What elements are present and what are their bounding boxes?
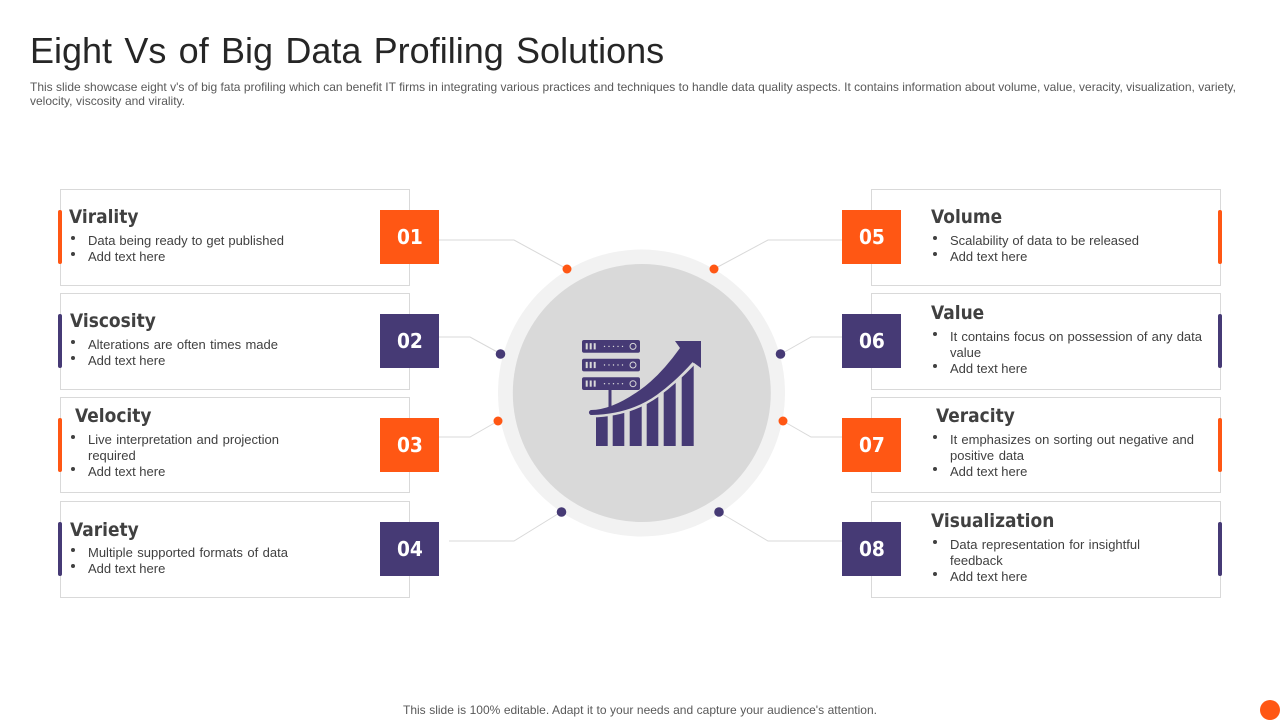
panel: 03 Velocity: Add text here	[88, 464, 165, 479]
panel: 06 Value: 06	[859, 329, 884, 353]
panel: 08 Visualization: Visualization	[931, 510, 1054, 532]
panel: 02 Viscosity	[58, 293, 439, 390]
panel: 02 Viscosity: Alterations are often times made	[88, 337, 278, 352]
panel: 02 Viscosity: Add text here	[88, 353, 165, 368]
panel: 08 Visualization	[842, 501, 1222, 598]
panel: 06 Value: Add text here	[950, 361, 1027, 376]
panel: 01 Virality: Add text here	[88, 249, 165, 264]
inner disc	[513, 264, 771, 522]
panel: 08 Visualization: Data representation for insightful	[950, 537, 1140, 552]
panel: 04 Variety: 04	[397, 537, 422, 561]
panel: 01 Virality	[58, 189, 439, 286]
panel: 06 Value: Value	[931, 302, 984, 324]
panel: 05 Volume: Add text here	[950, 249, 1027, 264]
panel: 06 Value: value	[950, 345, 981, 360]
central circle with icon	[498, 250, 785, 536]
panel: 01 Virality: Virality	[69, 206, 139, 228]
panel: 07 Veracity: positive data	[950, 448, 1024, 463]
panel: 04 Variety: Multiple supported formats of data	[88, 545, 288, 560]
panel: 07 Veracity: Add text here	[950, 464, 1027, 479]
panel: 06 Value: It contains focus on possession of any data	[950, 329, 1202, 344]
panel: 03 Velocity: required	[88, 448, 136, 463]
panel: 03 Velocity	[58, 397, 439, 493]
panel: 04 Variety	[58, 501, 439, 598]
panel: 01 Virality: 01	[397, 225, 422, 249]
panel: 08 Visualization: feedback	[950, 553, 1003, 568]
panel: 04 Variety: Variety	[70, 519, 139, 541]
footer note: This slide is 100% editable. Adapt it to your needs and capture your audience's attention.	[403, 703, 877, 717]
panel: 03 Velocity: 03	[397, 433, 422, 457]
panel: 08 Visualization: Add text here	[950, 569, 1027, 584]
outer ring	[498, 250, 785, 536]
panel: 01 Virality: Data being ready to get published	[88, 233, 284, 248]
panel: 07 Veracity: Veracity	[936, 405, 1015, 427]
panel: 07 Veracity	[842, 397, 1222, 493]
panel: 03 Velocity: Live interpretation and projection	[88, 432, 279, 447]
panel: 04 Variety: Add text here	[88, 561, 165, 576]
panel: 08 Visualization: 08	[859, 537, 884, 561]
icon: servers and rising chart	[582, 340, 701, 446]
panel: 03 Velocity: Velocity	[75, 405, 151, 427]
subtitle description: velocity, viscosity and virality.	[30, 94, 185, 108]
subtitle description	[30, 80, 1236, 108]
panel: 05 Volume: Volume	[931, 206, 1002, 228]
connector dots	[494, 264, 788, 517]
panel: 05 Volume: Scalability of data to be released	[950, 233, 1139, 248]
panel: 02 Viscosity: Viscosity	[70, 310, 156, 332]
panel: 06 Value	[842, 293, 1222, 390]
subtitle description: This slide showcase eight v's of big fata profiling which can benefit IT firms in integrating various practices and techniques to handle data quality aspects. It contains information about volume, value, veracity, visualization, variety,	[30, 80, 1236, 94]
title: Eight Vs of Big Data Profiling Solutions	[30, 30, 664, 71]
panel: 02 Viscosity: 02	[397, 329, 422, 353]
panel: 05 Volume: 05	[859, 225, 884, 249]
panel: 07 Veracity: 07	[859, 433, 884, 457]
panel: 05 Volume	[842, 189, 1222, 286]
corner dot	[1260, 700, 1280, 720]
panel: 07 Veracity: It emphasizes on sorting out negative and	[950, 432, 1194, 447]
